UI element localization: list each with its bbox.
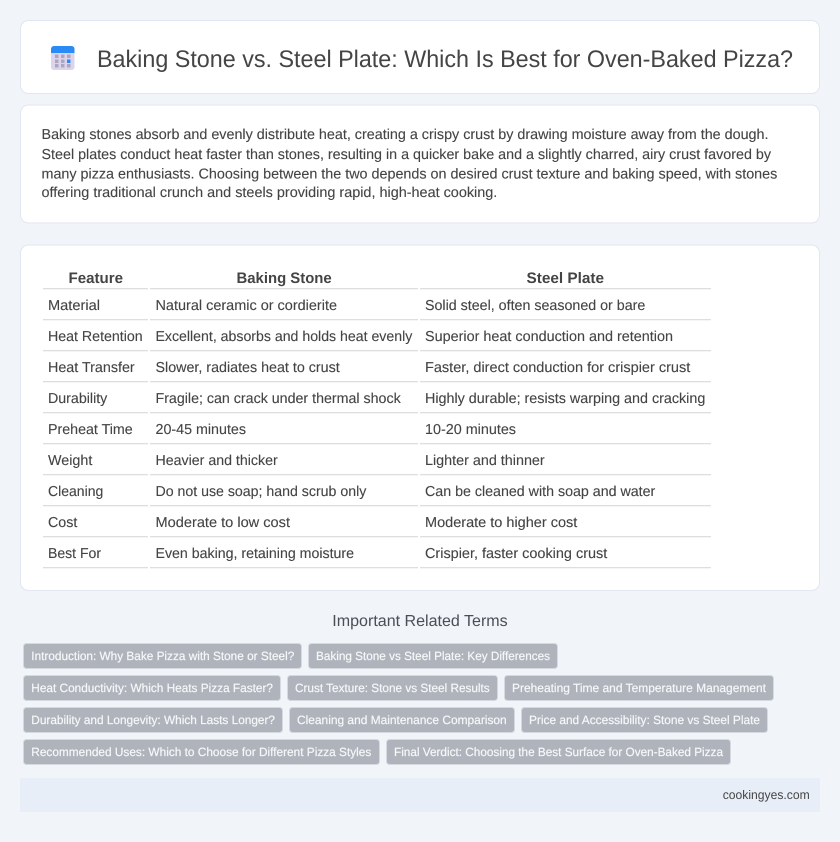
tag: Heat Conductivity: Which Heats Pizza Faster? (31, 681, 273, 695)
row: Durability (48, 391, 705, 407)
row: Durability: Highly durable; resists warping and cracking (425, 391, 705, 407)
row: Best For (48, 546, 607, 562)
table header row: Baking Stone (236, 270, 332, 287)
tag: Cleaning and Maintenance Comparison (297, 713, 507, 727)
row: Material (48, 298, 645, 314)
row: Heat Transfer (48, 360, 690, 376)
intro text: many pizza enthusiasts. Choosing between the two depends on desired crust texture and baking speed, with stones (42, 166, 777, 182)
tag (24, 676, 280, 700)
row: Cost: Moderate to low cost (156, 515, 290, 531)
table header row: Steel Plate (526, 270, 604, 287)
table header row: Feature (68, 270, 123, 287)
tag: Introduction: Why Bake Pizza with Stone or Steel? (31, 649, 295, 663)
row: Cost (48, 515, 577, 531)
footer source text: cookingyes.com (723, 788, 810, 802)
row: Cost: Moderate to higher cost (425, 515, 577, 531)
intro text: Steel plates conduct heat faster than stones, resulting in a quicker bake and a slightly charred, airy crust favored by (42, 147, 772, 163)
row: Best For: Best For (48, 546, 101, 562)
tag: Recommended Uses: Which to Choose for Different Pizza Styles (31, 745, 371, 759)
row: Weight: Weight (48, 453, 92, 469)
row: Material: Material (48, 298, 100, 314)
row: Material: Solid steel, often seasoned or bare (425, 298, 645, 314)
row: Preheat Time: Preheat Time (48, 422, 133, 438)
table header row (68, 270, 604, 287)
tag (504, 676, 774, 700)
tag (24, 740, 380, 764)
header panel (20, 20, 820, 94)
row: Heat Retention: Heat Retention (48, 329, 143, 345)
tag (308, 644, 558, 668)
tag: Price and Accessibility: Stone vs Steel Plate (529, 713, 760, 727)
row: Cleaning (48, 484, 655, 500)
row: Heat Transfer: Faster, direct conduction for crispier crust (425, 360, 690, 376)
tag (24, 644, 302, 668)
tag: Final Verdict: Choosing the Best Surface for Oven-Baked Pizza (394, 745, 723, 759)
row: Weight: Heavier and thicker (156, 453, 278, 469)
tag (522, 708, 768, 732)
row: Heat Retention: Excellent, absorbs and holds heat evenly (156, 329, 413, 345)
row: Preheat Time (48, 422, 516, 438)
tag (288, 676, 498, 700)
row: Heat Transfer: Heat Transfer (48, 360, 135, 376)
intro text (42, 127, 777, 201)
tag: Preheating Time and Temperature Management (512, 681, 767, 695)
tag (24, 708, 282, 732)
related terms heading: Important Related Terms (332, 613, 508, 630)
row: Cleaning: Cleaning (48, 484, 103, 500)
footer (20, 778, 820, 812)
tag (386, 740, 730, 764)
row: Heat Retention (48, 329, 673, 345)
row: Material: Natural ceramic or cordierite (156, 298, 337, 314)
row: Heat Retention: Superior heat conduction and retention (425, 329, 673, 345)
row: Best For: Even baking, retaining moisture (156, 546, 354, 562)
tag: Crust Texture: Stone vs Steel Results (295, 681, 490, 695)
row: Best For: Crispier, faster cooking crust (425, 546, 607, 562)
row: Durability: Durability (48, 391, 108, 407)
tag: Baking Stone vs Steel Plate: Key Differences (316, 649, 550, 663)
tag (290, 708, 514, 732)
tag: Durability and Longevity: Which Lasts Longer? (31, 713, 275, 727)
row: Preheat Time: 20-45 minutes (156, 422, 246, 438)
intro panel (20, 105, 820, 223)
related terms tags (24, 644, 774, 764)
row: Preheat Time: 10-20 minutes (425, 422, 516, 438)
intro text: offering traditional crunch and steels providing rapid, high-heat cooking. (42, 185, 497, 201)
icon: calendar (51, 46, 74, 70)
comparison table panel (20, 245, 820, 590)
row: Weight: Lighter and thinner (425, 453, 545, 469)
row: Cost: Cost (48, 515, 77, 531)
row: Durability: Fragile; can crack under thermal shock (156, 391, 401, 407)
title: Baking Stone vs. Steel Plate: Which Is Best for Oven-Baked Pizza? (97, 46, 793, 73)
row: Heat Transfer: Slower, radiates heat to crust (156, 360, 340, 376)
intro text: Baking stones absorb and evenly distribute heat, creating a crispy crust by drawing moisture away from the dough. (42, 127, 768, 143)
row: Cleaning: Do not use soap; hand scrub only (156, 484, 367, 500)
row: Cleaning: Can be cleaned with soap and water (425, 484, 655, 500)
row: Weight (48, 453, 545, 469)
